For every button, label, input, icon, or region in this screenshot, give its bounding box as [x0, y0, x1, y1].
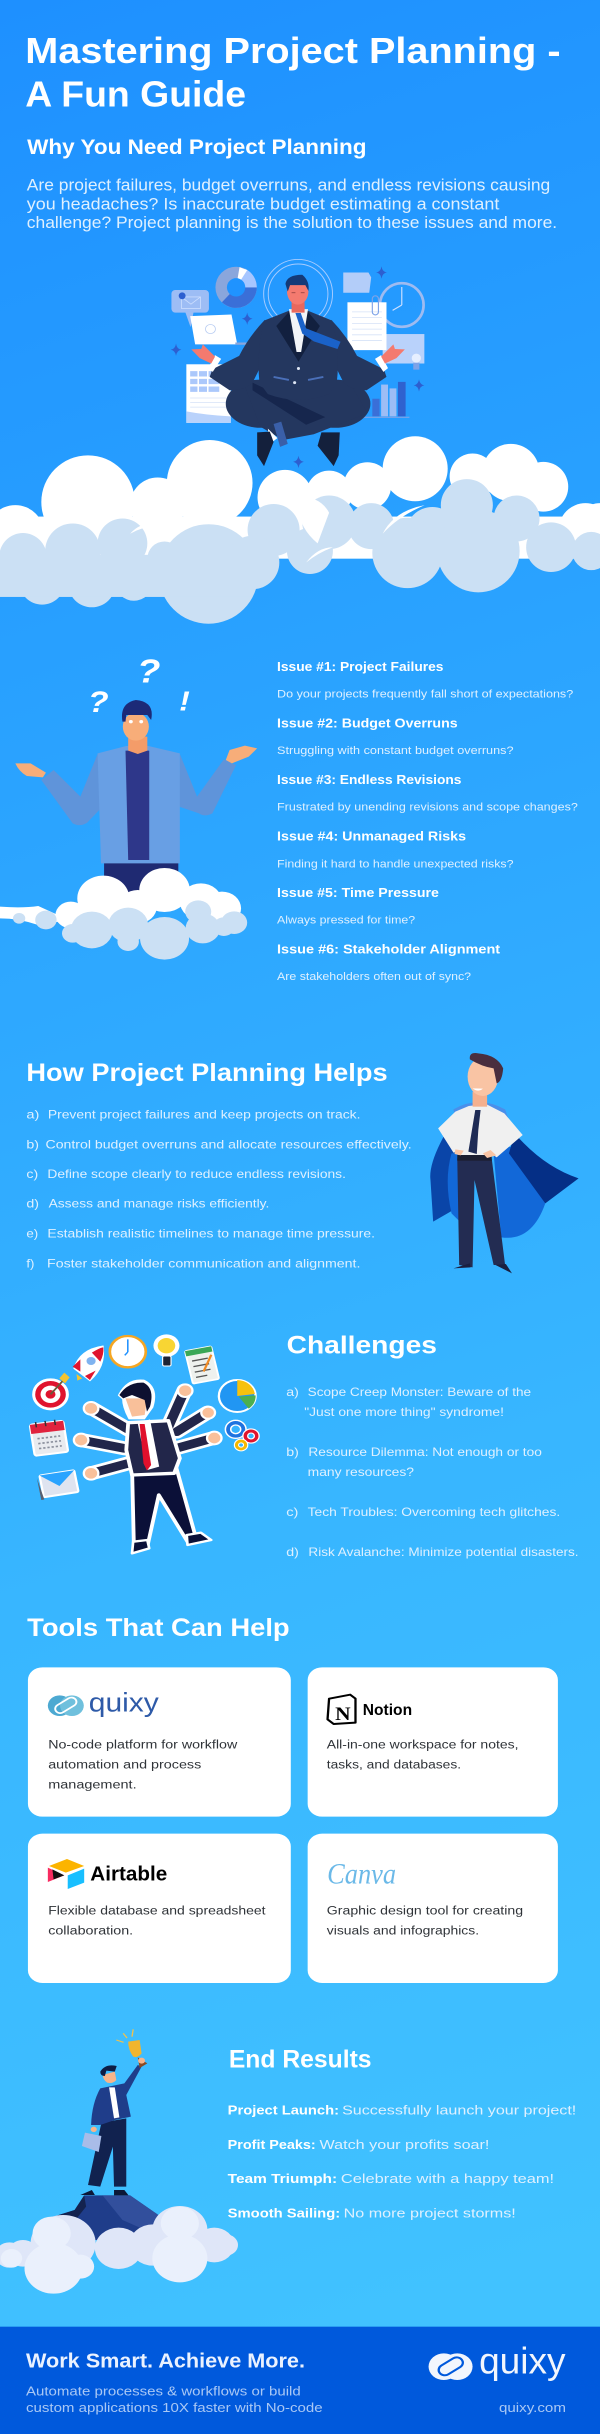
icon: notion logo [328, 1695, 355, 1725]
intro paragraph [27, 176, 557, 232]
icon: folder [343, 272, 371, 293]
icon: pie chart [219, 1380, 256, 1412]
wordmark: airtable: Airtable [90, 1862, 167, 1885]
description [48, 1904, 266, 1937]
illustration: mountain, cloud and man with trophy [0, 2029, 238, 2294]
icon: clock [110, 1336, 146, 1367]
figure shirt [109, 2087, 119, 2118]
icon: envelope [36, 1470, 79, 1500]
briefcase [82, 2127, 101, 2152]
arms [81, 1391, 214, 1473]
heading: End Results [229, 2045, 372, 2073]
question marks: ! [179, 687, 190, 717]
trousers [457, 1158, 505, 1267]
footer description [26, 2385, 323, 2415]
issue 4: Finding it hard to handle unexpected risks? [277, 857, 514, 870]
head [119, 1381, 153, 1417]
card: quixy [28, 1667, 291, 1817]
heading: Challenges [287, 1331, 437, 1359]
icon: envelope bubble [171, 290, 209, 327]
issue 6 [277, 941, 500, 983]
result 4: Smooth Sailing: [228, 2205, 340, 2220]
description [327, 1738, 518, 1771]
icon: rocket [73, 1347, 103, 1381]
wordmark: quixy: quixy [89, 1688, 159, 1718]
left arm [15, 754, 103, 825]
title: A Fun Guide [25, 73, 246, 114]
figure head [100, 2065, 117, 2083]
heading: How Project Planning Helps [26, 1059, 388, 1087]
section: challenges [29, 1331, 579, 1559]
icon: airtable logo [48, 1859, 84, 1889]
mountain [54, 2195, 161, 2240]
issue 5: Always pressed for time? [277, 913, 415, 926]
list of challenges: Resource Dilemma: Not enough or too [308, 1445, 542, 1459]
section: end results [0, 2029, 600, 2434]
issue 2 [277, 715, 514, 757]
wordmark: canva: Canva [327, 1857, 396, 1890]
description: All-in-one workspace for notes, [327, 1738, 518, 1751]
figure: legs [226, 380, 370, 466]
shoes [132, 1533, 211, 1553]
issue 6: Are stakeholders often out of sync? [277, 970, 471, 983]
head [122, 700, 152, 754]
description: automation and process [48, 1758, 201, 1771]
result 3: Team Triumph: [228, 2171, 337, 2186]
t-shirt [126, 751, 149, 860]
issue 2: Struggling with constant budget overruns? [277, 744, 514, 757]
section: issues [0, 653, 578, 983]
figure jacket [91, 2065, 142, 2125]
footer description: Automate processes & workflows or build [26, 2385, 301, 2398]
trophy [116, 2029, 147, 2068]
issue 6: Issue #6: Stakeholder Alignment [277, 941, 500, 956]
right arm [179, 746, 257, 815]
heading: why: Why You Need Project Planning [27, 135, 367, 159]
list of benefits: a) [26, 1108, 39, 1121]
description: tasks, and databases. [327, 1758, 461, 1771]
issue 4: Issue #4: Unmanaged Risks [277, 829, 466, 843]
title: Mastering Project Planning - [25, 30, 561, 71]
icon: certificate [383, 334, 424, 370]
heading: Tools That Can Help [27, 1614, 290, 1642]
figure: head [285, 275, 309, 313]
shirt and red tie [138, 1419, 159, 1471]
issue 5 [277, 885, 439, 926]
icon: halo [264, 259, 333, 328]
intro paragraph: challenge? Project planning is the solution to these issues and more. [27, 213, 557, 232]
list of challenges: a) [286, 1385, 299, 1399]
issue 1: Issue #1: Project Failures [277, 659, 444, 674]
description: No-code platform for workflow [48, 1738, 238, 1751]
shoes [453, 1263, 512, 1273]
intro paragraph: you headaches? Is inaccurate budget estimating a constant [27, 194, 500, 213]
illustration: multitasking man [29, 1334, 257, 1553]
card: airtable [28, 1834, 291, 1983]
result 1: Project Launch: [228, 2103, 339, 2117]
description: management. [48, 1778, 137, 1791]
title [25, 30, 561, 114]
icon: notion logo: N [335, 1704, 351, 1725]
icon: light bulb [153, 1334, 179, 1366]
wordmark: quixy white: quixy [479, 2341, 566, 2382]
issue 3 [277, 772, 578, 813]
intro paragraph: Are project failures, budget overruns, and endless revisions causing [27, 176, 550, 195]
icon: wall clock [380, 283, 424, 327]
issue 3: Frustrated by unending revisions and scope changes? [277, 800, 578, 813]
icon: laptop [190, 315, 253, 345]
list of benefits [26, 1108, 412, 1270]
illustration: superhero manager [430, 1053, 579, 1273]
result 2: Profit Peaks: [228, 2137, 316, 2152]
tie [468, 1110, 481, 1154]
list of challenges: d) [286, 1545, 299, 1559]
list of challenges: "Just one more thing" syndrome! [304, 1405, 504, 1419]
list of challenges: Tech Troubles: Overcoming tech glitches. [308, 1505, 560, 1519]
icon: quixy logo white [429, 2353, 473, 2380]
list of challenges: Risk Avalanche: Minimize potential disasters. [308, 1545, 579, 1559]
hands [455, 1149, 496, 1158]
result 4 [228, 2205, 516, 2220]
icon: spreadsheet [186, 364, 231, 423]
illustration: meditating businessman [171, 259, 424, 468]
list of benefits: f) [26, 1256, 34, 1270]
tagline: Work Smart. Achieve More. [26, 2350, 305, 2372]
torso [126, 1421, 180, 1475]
question marks: ? [137, 653, 160, 690]
list of challenges: b) [286, 1445, 299, 1459]
description: visuals and infographics. [327, 1924, 479, 1937]
icon: gears [228, 1423, 257, 1449]
list of benefits: c) [26, 1167, 38, 1181]
result 4: No more project storms! [344, 2205, 516, 2220]
head [468, 1053, 503, 1107]
result 2 [228, 2137, 489, 2152]
icon: bar chart [362, 382, 409, 418]
icon: checklist [185, 1346, 219, 1384]
cloud [0, 2206, 238, 2294]
result 3 [228, 2171, 554, 2186]
figure: torso [259, 309, 341, 400]
list of benefits: Assess and manage risks efficiently. [49, 1197, 269, 1210]
list of benefits: d) [26, 1197, 39, 1210]
icon: calendar [29, 1419, 68, 1456]
jacket [98, 746, 180, 863]
cloud [0, 868, 247, 960]
figure legs [88, 2118, 126, 2187]
result 3: Celebrate with a happy team! [341, 2171, 554, 2186]
list of challenges: Scope Creep Monster: Beware of the [308, 1385, 531, 1399]
fists [74, 1384, 222, 1480]
card: notion [308, 1667, 558, 1817]
cloud band [0, 436, 600, 624]
section: how project planning helps [26, 1053, 579, 1273]
result 1: Successfully launch your project! [342, 2103, 576, 2117]
list of benefits: e) [26, 1226, 38, 1240]
list of challenges: many resources? [308, 1465, 414, 1479]
question marks [88, 653, 190, 719]
cape [430, 1102, 579, 1238]
list of benefits: b) [26, 1137, 39, 1151]
description: Flexible database and spreadsheet [48, 1904, 266, 1917]
issue 1 [277, 659, 573, 700]
list of benefits: Control budget overruns and allocate resources effectively. [46, 1137, 412, 1151]
list of benefits: Prevent project failures and keep projects on track. [48, 1108, 360, 1121]
description: collaboration. [48, 1924, 133, 1937]
section: tools [27, 1614, 558, 1983]
issue 5: Issue #5: Time Pressure [277, 885, 439, 900]
trousers [104, 862, 178, 895]
footer description: custom applications 10X faster with No-code [26, 2401, 323, 2415]
icon: quixy logo [48, 1695, 84, 1716]
legs [132, 1467, 195, 1548]
icon: donut chart [215, 267, 257, 308]
figure shoes [80, 2190, 129, 2195]
result 1 [228, 2103, 576, 2117]
description [48, 1738, 238, 1791]
card: canva [308, 1834, 558, 1983]
issue 3: Issue #3: Endless Revisions [277, 772, 462, 787]
description [327, 1904, 523, 1937]
list of benefits: Define scope clearly to reduce endless revisions. [47, 1167, 346, 1181]
issue 1: Do your projects frequently fall short of expectations? [277, 687, 573, 700]
question marks: ? [88, 685, 109, 719]
figure: arms and hands [191, 320, 405, 390]
belt [457, 1155, 492, 1161]
section: why you need project planning [0, 30, 600, 624]
result 2: Watch your profits soar! [320, 2137, 489, 2152]
website: quixy.com [499, 2401, 566, 2415]
icon: target [34, 1373, 70, 1409]
list of challenges: c) [286, 1505, 298, 1519]
list of challenges [286, 1385, 579, 1559]
icon: document with clip [347, 296, 386, 350]
shirt [438, 1104, 523, 1157]
footer band [0, 2327, 600, 2434]
list of benefits: Establish realistic timelines to manage time pressure. [47, 1226, 375, 1240]
sparkles [171, 266, 424, 468]
description: Graphic design tool for creating [327, 1904, 523, 1917]
illustration: confused man [15, 653, 257, 895]
wordmark: notion: Notion [363, 1702, 412, 1719]
issue 2: Issue #2: Budget Overruns [277, 715, 458, 730]
issue 4 [277, 829, 514, 870]
list of benefits: Foster stakeholder communication and alignment. [47, 1256, 360, 1270]
